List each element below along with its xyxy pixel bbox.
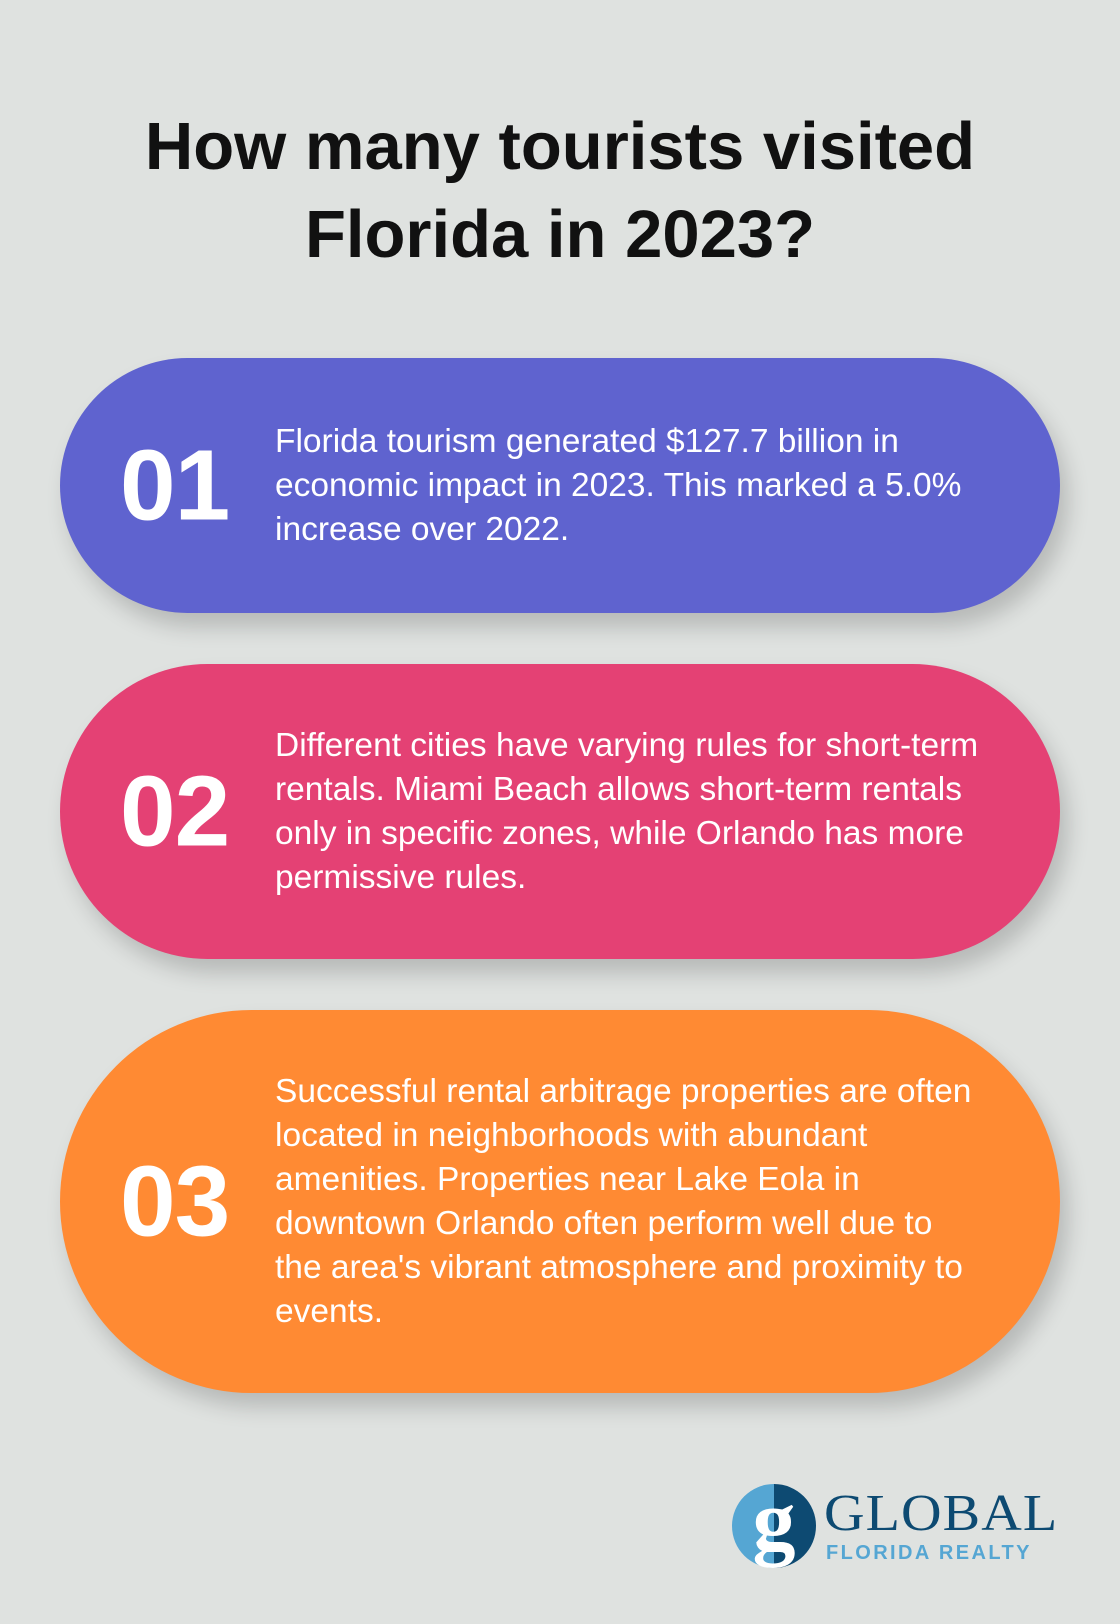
icon: g circle: g xyxy=(752,1472,796,1568)
text 03: located in neighborhoods with abundant xyxy=(275,1116,867,1154)
text 01: Florida tourism generated $127.7 billion in xyxy=(275,422,899,460)
number 01: 01 xyxy=(120,429,229,541)
text 03: amenities. Properties near Lake Eola in xyxy=(275,1160,860,1198)
text 02: rentals. Miami Beach allows short-term rentals xyxy=(275,770,962,808)
text 01: economic impact in 2023. This marked a 5.0% xyxy=(275,466,961,504)
panel: 03 xyxy=(60,1010,1060,1393)
logo xyxy=(732,1472,1058,1568)
text 03: downtown Orlando often perform well due to xyxy=(275,1204,932,1242)
logo: FLORIDA REALTY xyxy=(826,1542,1032,1564)
text 01 xyxy=(275,422,961,548)
title: How many tourists visited xyxy=(145,109,975,184)
text 01: increase over 2022. xyxy=(275,510,569,548)
text 03: the area's vibrant atmosphere and proximity to xyxy=(275,1248,963,1286)
panel: 01 xyxy=(60,358,1060,613)
number 03: 03 xyxy=(120,1145,229,1257)
panel: 02 xyxy=(60,664,1060,959)
logo text: GLOBAL xyxy=(824,1485,1058,1542)
text 03: events. xyxy=(275,1292,383,1330)
text 02: Different cities have varying rules for short-term xyxy=(275,726,978,764)
text 02: permissive rules. xyxy=(275,858,526,896)
text 03: Successful rental arbitrage properties are often xyxy=(275,1072,971,1110)
text 02: only in specific zones, while Orlando has more xyxy=(275,814,964,852)
icon: g circle xyxy=(732,1484,816,1568)
title xyxy=(145,109,975,272)
text 02 xyxy=(275,726,978,896)
number 02: 02 xyxy=(120,755,229,867)
text 03 xyxy=(275,1072,971,1330)
title: Florida in 2023? xyxy=(305,197,815,272)
